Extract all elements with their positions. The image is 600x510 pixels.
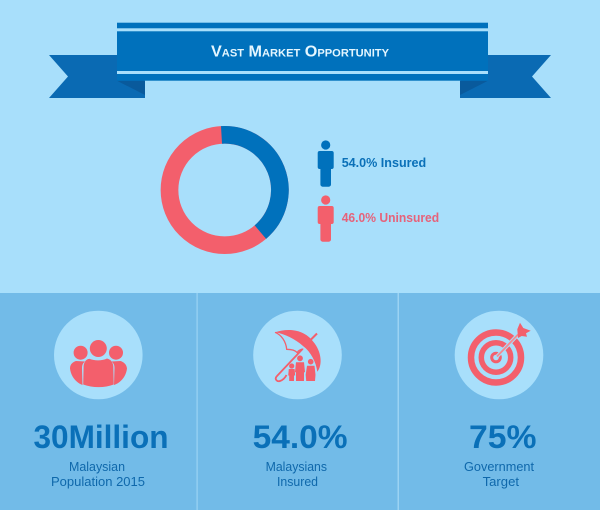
legend: uninsured: 46.0% Uninsured [342, 210, 439, 225]
value: 30Million [34, 419, 168, 455]
caption: Malaysian [69, 460, 125, 474]
value: 75% [469, 419, 536, 455]
caption [51, 460, 145, 489]
panel: population [34, 311, 168, 489]
legend: uninsured [318, 195, 439, 242]
panel: government target [455, 311, 543, 489]
panel: insured [253, 311, 348, 489]
icon: umbrella over family [275, 330, 321, 381]
bottom stats band [0, 293, 600, 510]
caption [266, 460, 327, 489]
caption: Insured [277, 475, 318, 489]
legend: insured: 54.0% Insured [342, 155, 426, 170]
caption: Malaysians [266, 460, 327, 474]
caption: Population 2015 [51, 475, 145, 489]
icon: target with arrow [471, 323, 531, 382]
donut chart [170, 135, 280, 245]
title: Vast Market Opportunity [211, 44, 390, 61]
caption: Government [464, 460, 535, 474]
icon: group of people [70, 340, 127, 387]
title ribbon [49, 23, 551, 98]
caption [464, 460, 535, 489]
value: 54.0% [253, 419, 348, 455]
legend: insured [318, 140, 426, 187]
caption: Target [483, 475, 520, 489]
